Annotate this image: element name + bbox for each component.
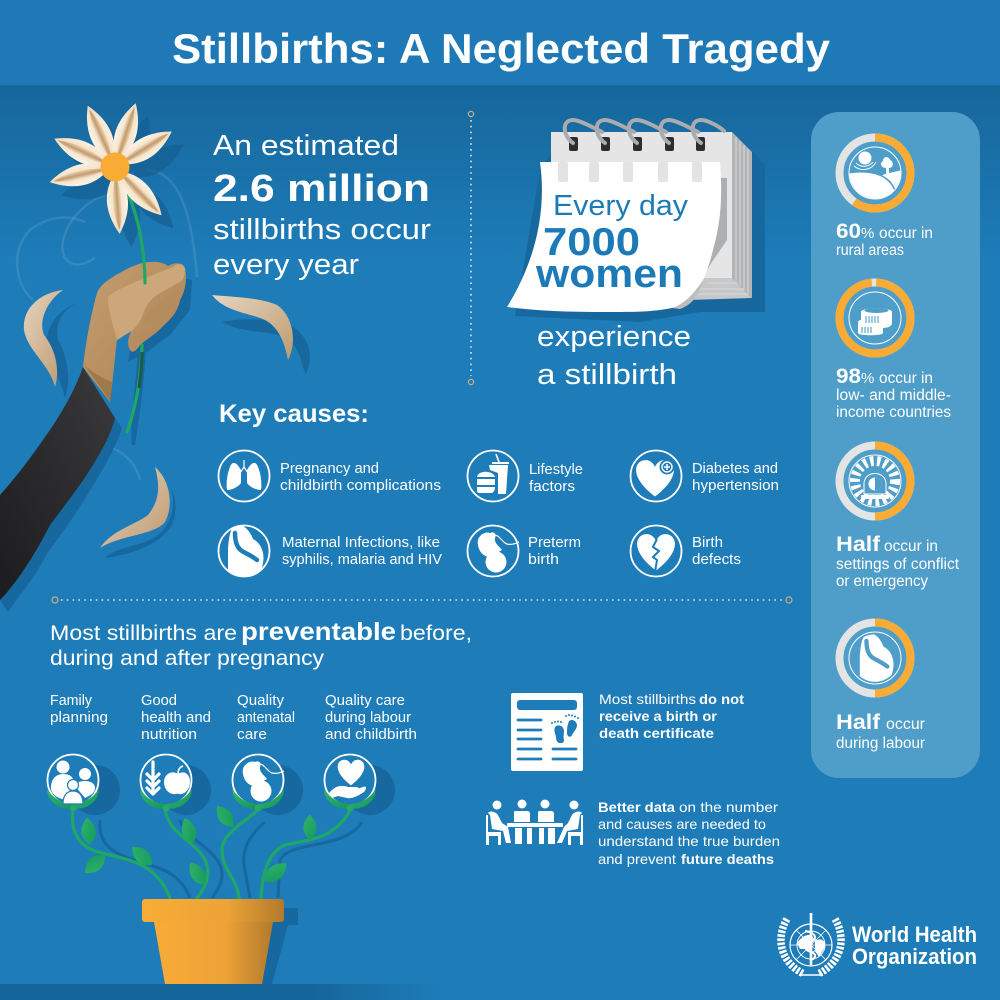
- stat: half during labour: occur: [886, 716, 925, 733]
- calendar tabs: [558, 162, 702, 182]
- right side statistics panel: [811, 112, 980, 778]
- heading: most stillbirths are preventable: before,: [400, 622, 472, 645]
- label: family planning: Family: [50, 693, 93, 709]
- flower stem: [127, 345, 142, 432]
- label: family planning: planning: [50, 710, 108, 726]
- label: quality care during labour: [325, 693, 417, 743]
- caption: experience a stillbirth: [537, 321, 691, 391]
- label: good health and nutrition: [141, 693, 211, 743]
- stat: 60% rural areas: 60: [836, 220, 861, 243]
- text: better data: and causes are needed to: [598, 816, 766, 832]
- label: quality antenatal care: Quality: [237, 693, 285, 709]
- headline: 2.6 million stillbirths: [213, 130, 431, 281]
- title band: [0, 0, 1000, 85]
- text: better data: on the number: [679, 799, 778, 815]
- calendar text: 7000: [543, 221, 640, 264]
- icon: wheat and apple: [147, 762, 190, 794]
- heading: most stillbirths are preventable: during and after pregnancy: [50, 647, 325, 670]
- calendar shadow: [515, 140, 765, 322]
- label: good health and nutrition: health and: [141, 710, 211, 726]
- WHO logo: [781, 913, 977, 975]
- icon: birth certificate: [511, 693, 583, 771]
- calendar curled front page: [507, 162, 721, 312]
- cause: maternal infections: syphilis, malaria and HIV: [282, 552, 442, 568]
- stat: 98% low- and middle-income countries: %: [861, 370, 874, 387]
- stat: 60% rural areas: %: [861, 225, 874, 242]
- cause: pregnancy complications: childbirth complications: [280, 478, 441, 494]
- calendar rings: [565, 120, 724, 143]
- icon: hand holding heart: [329, 760, 366, 798]
- calendar holes: [569, 137, 705, 151]
- stat: half during labour: Half: [836, 711, 881, 734]
- cause: birth defects: [630, 526, 741, 576]
- text: better data: and prevent: [598, 851, 676, 867]
- cause: diabetes and hypertension: Diabetes and: [692, 461, 778, 477]
- cause: preterm birth: Preterm: [528, 535, 581, 551]
- flower petals: [47, 100, 177, 235]
- label: quality antenatal care: [237, 693, 295, 743]
- potted plant with prevention icons: [47, 754, 395, 984]
- cause: preterm birth: birth: [528, 552, 559, 568]
- horizontal dotted divider: [52, 597, 792, 603]
- text: better data: future deaths: [681, 851, 774, 867]
- text: better data: [598, 799, 780, 867]
- text: birth or death certificate: do not: [699, 691, 744, 707]
- text: birth or death certificate: Most stillbirths: [599, 691, 696, 707]
- cause: diabetes and hypertension: hypertension: [692, 478, 779, 494]
- vertical dotted divider: [468, 111, 474, 385]
- bottom strip: [0, 984, 440, 1000]
- stat: half during labour: [836, 622, 925, 752]
- headline: 2.6 million stillbirths: An estimated: [213, 130, 399, 162]
- icon: family: [51, 760, 95, 804]
- flower pot: [142, 899, 298, 984]
- shadows of arm, hand and flower: [0, 113, 192, 612]
- stat: 98% low- and middle-income countries: income countries: [836, 404, 951, 421]
- illustration: hand holding flower with falling petals: [0, 100, 310, 612]
- label: quality care during labour: and childbirth: [325, 727, 417, 743]
- title: Stillbirths: A Neglected Tragedy: [172, 25, 831, 72]
- falling petal right: [212, 295, 310, 374]
- cause: lifestyle factors: factors: [529, 479, 575, 495]
- calendar: [507, 120, 765, 322]
- cause: maternal infections: Maternal Infections, like: [282, 535, 440, 551]
- WHO wordmark: World Health: [852, 922, 977, 947]
- heading: most stillbirths are preventable: preventable: [241, 618, 396, 646]
- stat: half in conflict or emergency: Half: [836, 533, 881, 556]
- cause: lifestyle factors: [468, 450, 583, 502]
- stat: 98% low- and middle-income countries: occur in: [879, 370, 933, 387]
- cause: preterm birth: [468, 526, 581, 576]
- stat: half in conflict or emergency: [836, 446, 960, 590]
- label: quality antenatal care: antenatal: [237, 710, 295, 726]
- falling petal bottom: [100, 467, 175, 558]
- icon: people meeting at a table: [486, 800, 583, 845]
- WHO emblem: [781, 913, 841, 975]
- calendar text: Every day: [553, 190, 689, 222]
- label: quality care during labour: Quality care: [325, 693, 405, 709]
- heading: most stillbirths are preventable: Most stillbirths are: [50, 622, 237, 645]
- prevention column labels: [50, 693, 417, 743]
- headline: 2.6 million stillbirths: every year: [213, 249, 359, 281]
- stat: 60% rural areas: rural areas: [836, 242, 904, 259]
- heading: key causes: Key causes:: [219, 400, 369, 428]
- hand: [83, 192, 186, 402]
- sleeve: [0, 367, 115, 600]
- calendar text: [535, 190, 689, 296]
- stat: 98% low- and middle-income countries: [836, 281, 951, 421]
- text: better data: Better data: [598, 799, 675, 815]
- stat: half during labour: during labour: [836, 735, 925, 752]
- label: good health and nutrition: Good: [141, 693, 177, 709]
- headline: 2.6 million stillbirths: 2.6 million: [213, 168, 430, 210]
- cause: diabetes and hypertension: [630, 450, 779, 502]
- cause: maternal infections: [218, 525, 442, 577]
- text: birth or death certificate: [599, 691, 744, 741]
- plant stems: [72, 808, 350, 898]
- wisps: [17, 170, 197, 480]
- stat: 60% rural areas: [836, 138, 933, 259]
- icon rings: [48, 754, 376, 806]
- calendar back pages: [732, 132, 752, 298]
- key causes icons and labels: [218, 450, 779, 577]
- headline: 2.6 million stillbirths: stillbirths occur: [213, 214, 431, 246]
- label: quality antenatal care: care: [237, 727, 267, 743]
- stat: half in conflict or emergency: or emergency: [836, 573, 928, 590]
- stat: half in conflict or emergency: occur in: [884, 538, 938, 555]
- cause: pregnancy complications: [218, 450, 441, 502]
- label: quality care during labour: during labour: [325, 710, 411, 726]
- cause: birth defects: Birth: [692, 535, 723, 551]
- icon: fetus: [243, 761, 284, 802]
- cause: lifestyle factors: Lifestyle: [529, 462, 583, 478]
- label: good health and nutrition: nutrition: [141, 727, 197, 743]
- text: better data: understand the true burden: [598, 833, 780, 849]
- WHO wordmark: Organization: [852, 944, 977, 969]
- text: birth or death certificate: receive a birth or: [599, 708, 718, 724]
- plant shadow: [70, 765, 395, 898]
- plant leaves: [80, 802, 317, 889]
- cause: birth defects: defects: [692, 552, 741, 568]
- WHO wordmark: [852, 922, 977, 969]
- cause: pregnancy complications: Pregnancy and: [280, 461, 379, 477]
- caption: experience a stillbirth: experience: [537, 321, 691, 353]
- stat: 98% low- and middle-income countries: 98: [836, 365, 861, 388]
- text: birth or death certificate: death certificate: [599, 725, 714, 741]
- heading: most stillbirths are preventable: [50, 618, 472, 670]
- stat: half in conflict or emergency: settings of conflict: [836, 556, 960, 573]
- calendar text: women: [535, 252, 683, 296]
- stat: 60% rural areas: occur in: [879, 225, 933, 242]
- label: family planning: [50, 693, 108, 726]
- stat: 98% low- and middle-income countries: low- and middle-: [836, 387, 951, 404]
- caption: experience a stillbirth: a stillbirth: [537, 359, 677, 391]
- leaf cups under icons: [47, 789, 376, 811]
- falling petal left: [24, 290, 77, 398]
